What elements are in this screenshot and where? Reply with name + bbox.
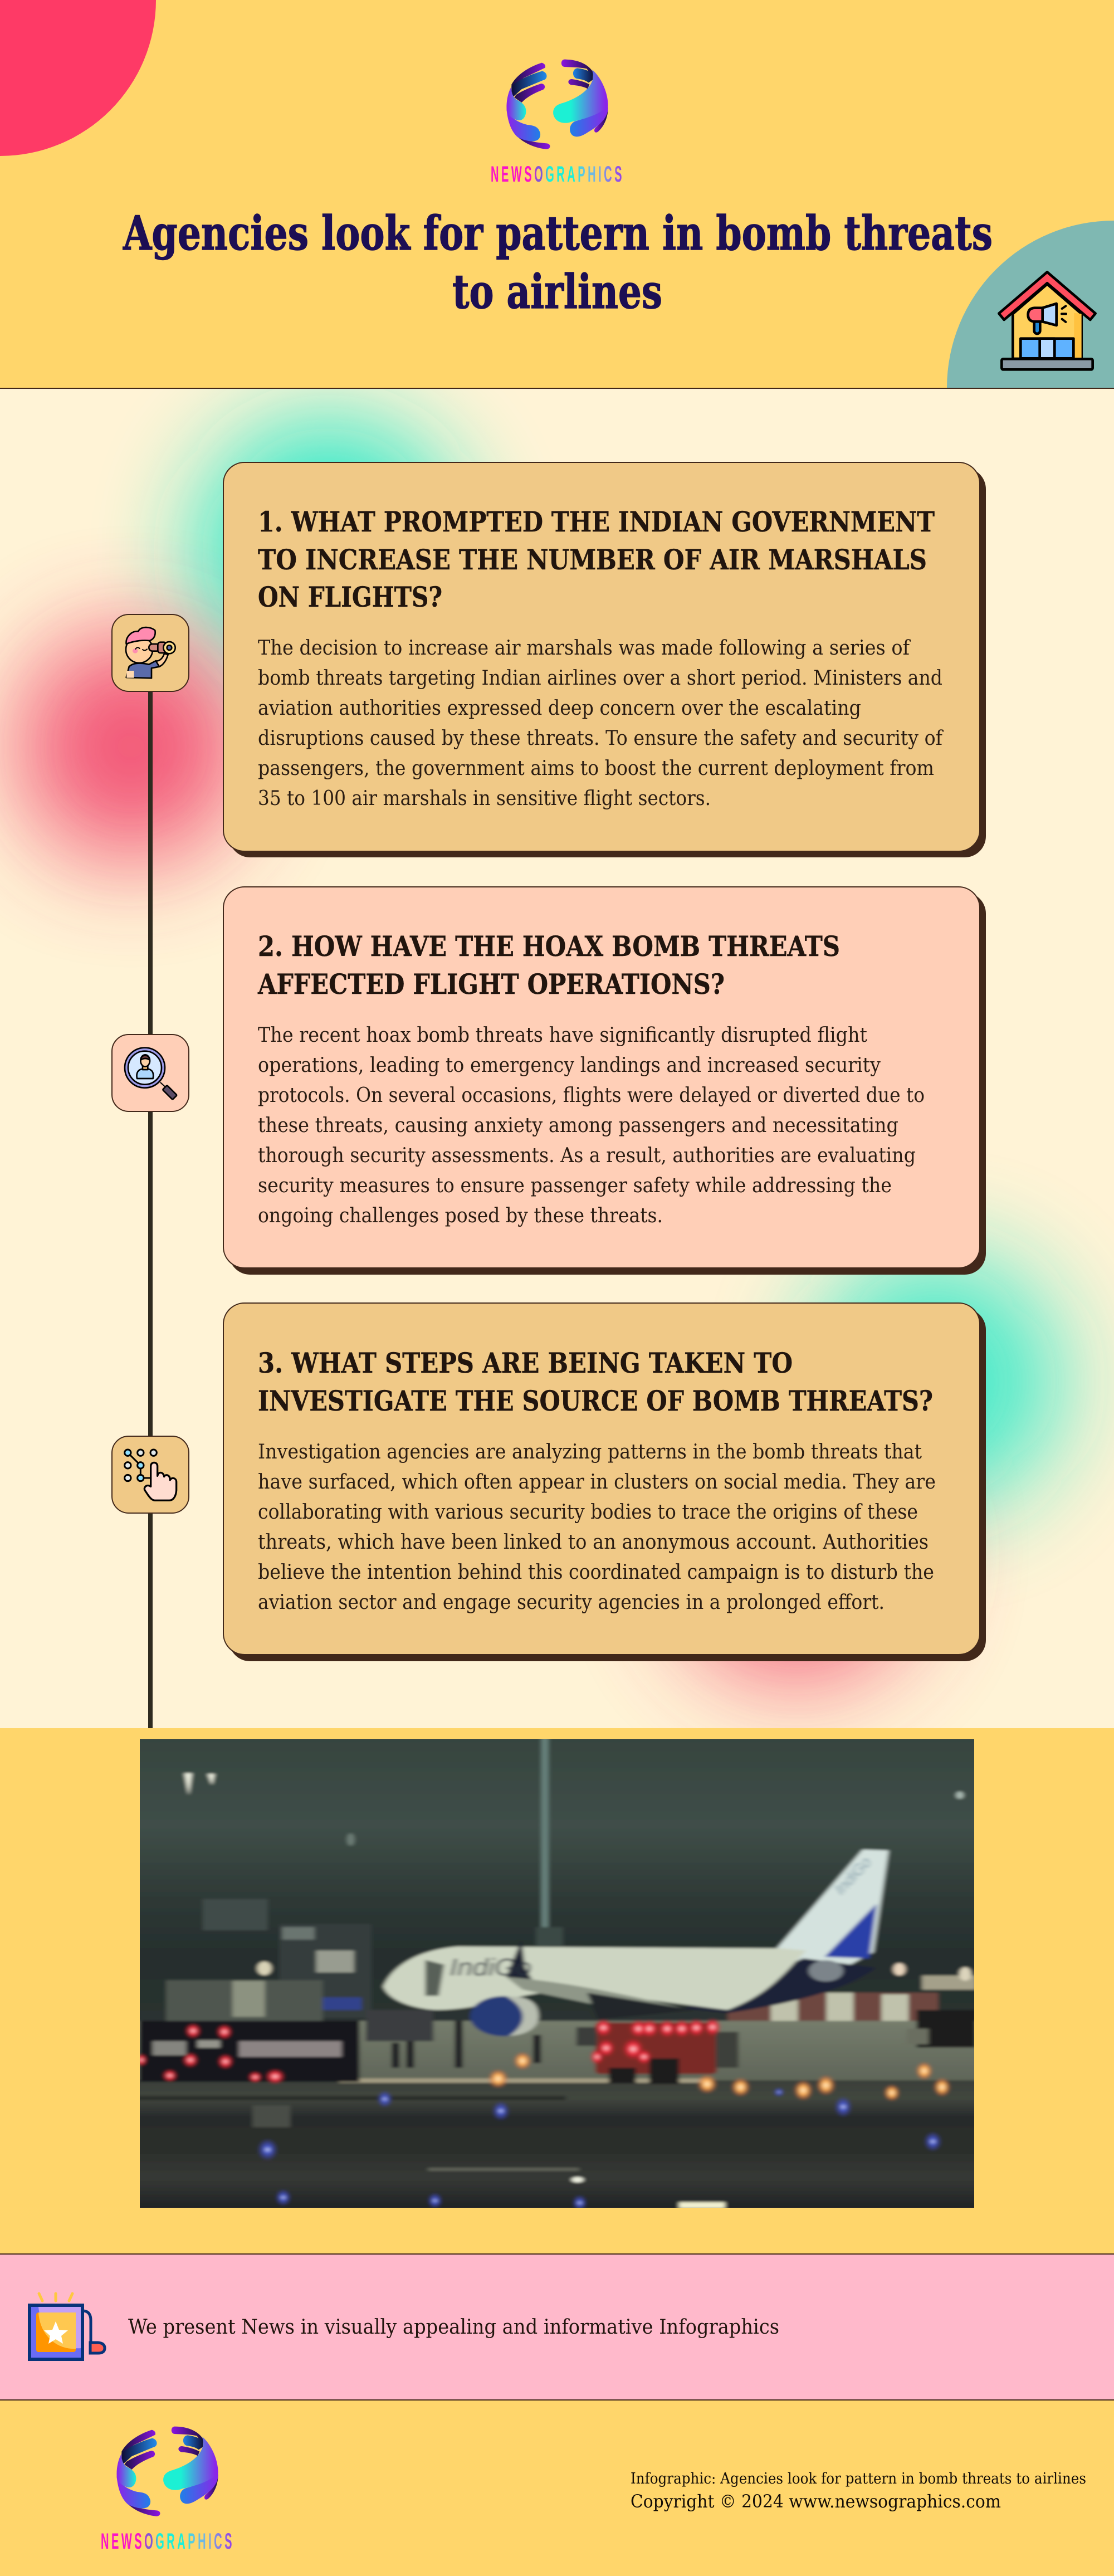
icon tile 2: magnifier with person xyxy=(112,1035,189,1111)
title: to airlines xyxy=(452,264,662,319)
card 1 body text: passengers, the government aims to boost the current deployment from xyxy=(258,757,934,780)
card 1 body text: bomb threats targeting Indian airlines over a short period. Ministers and xyxy=(258,667,942,690)
icon tile 1: person with telescope xyxy=(112,614,189,691)
parked buses xyxy=(139,2021,359,2082)
aircraft xyxy=(366,1850,888,2068)
panel: timeline section background xyxy=(0,389,1114,1728)
card 2 heading: 2. HOW HAVE THE HOAX BOMB THREATS xyxy=(258,930,840,963)
blurred teal glow top xyxy=(198,421,460,682)
teal quarter circle xyxy=(947,221,1114,388)
footer credit text: Copyright © 2024 www.newsographics.com xyxy=(631,2491,1001,2512)
card 1 heading: TO INCREASE THE NUMBER OF AIR MARSHALS xyxy=(258,543,927,576)
card 3 heading: 3. WHAT STEPS ARE BEING TAKEN TO xyxy=(258,1346,793,1379)
card 1 heading: ON FLIGHTS? xyxy=(258,580,442,613)
card 1 body text xyxy=(258,637,944,810)
card 3 shadow xyxy=(229,1309,986,1661)
footer logo wordmark: NEWSOGRAPHICS xyxy=(101,2529,234,2554)
footer logo xyxy=(101,2427,234,2554)
night sky xyxy=(123,1733,992,2027)
blue taxiway lights xyxy=(258,2087,941,2211)
icon: mug with star xyxy=(30,2294,105,2359)
card 2 heading: AFFECTED FLIGHT OPERATIONS? xyxy=(257,968,725,1001)
apron xyxy=(123,2021,992,2082)
card 2 body text: protocols. On several occasions, flights were delayed or diverted due to xyxy=(258,1084,925,1107)
header panel xyxy=(0,0,1114,389)
card 2 heading xyxy=(257,930,840,1001)
footer credit text xyxy=(631,2470,1086,2512)
timeline vertical line xyxy=(148,691,153,1728)
card 1 shadow xyxy=(229,468,986,857)
card 2 body text: The recent hoax bomb threats have significantly disrupted flight xyxy=(258,1024,867,1047)
logo mark xyxy=(506,60,608,149)
card 3 body text: believe the intention behind this coordinated campaign is to disturb the xyxy=(258,1561,934,1584)
card 2 shadow xyxy=(229,892,986,1275)
orange runway lights xyxy=(488,2052,950,2101)
card 2 body text: operations, leading to emergency landings and increased security xyxy=(258,1054,881,1077)
card 3 body text: Investigation agencies are analyzing patterns in the bomb threats that xyxy=(258,1441,922,1463)
strapline text: We present News in visually appealing and informative Infographics xyxy=(128,2316,779,2339)
header divider xyxy=(0,388,1114,389)
card 1 heading: 1. WHAT PROMPTED THE INDIAN GOVERNMENT xyxy=(258,505,935,538)
card 2 body text: these threats, causing anxiety among passengers and necessitating xyxy=(258,1114,898,1137)
runway foreground xyxy=(123,2080,992,2214)
card 1 xyxy=(223,462,986,857)
card 3 panel xyxy=(223,1303,980,1655)
light pole xyxy=(541,1733,548,1946)
card 2 body text: ongoing challenges posed by these threats. xyxy=(258,1204,663,1227)
card 3 heading xyxy=(258,1346,933,1417)
footer logo mark xyxy=(116,2427,218,2516)
card 2 panel xyxy=(223,887,980,1268)
card 2 xyxy=(223,887,986,1275)
card 1 body text: aviation authorities expressed deep concern over the escalating xyxy=(258,697,861,720)
card 1 heading xyxy=(258,505,935,613)
decorative pink quarter circle xyxy=(0,0,156,156)
logo: newsographics xyxy=(491,60,624,187)
card 3 body text xyxy=(258,1441,936,1614)
blurred pink glow left xyxy=(17,632,245,861)
card 3 body text: collaborating with various security bodies to trace the origins of these xyxy=(258,1501,918,1524)
card 1 body text: 35 to 100 air marshals in sensitive flight sectors. xyxy=(258,787,711,810)
logo wordmark: NEWSOGRAPHICS xyxy=(491,162,624,187)
card 3 xyxy=(223,1303,986,1661)
card 3 body text: aviation sector and engage security agencies in a prolonged effort. xyxy=(258,1591,885,1614)
icon: house with megaphone xyxy=(999,272,1096,369)
card 2 body text: security measures to ensure passenger safety while addressing the xyxy=(258,1174,892,1197)
blurred pink glow bottom xyxy=(671,1429,922,1680)
icon tile 3: hand on pattern dots xyxy=(112,1436,189,1513)
distant hangar xyxy=(727,1963,976,2022)
blurred teal glow right xyxy=(810,1256,1061,1507)
card 3 body text: have surfaced, which often appear in clusters on social media. They are xyxy=(258,1471,936,1494)
card 3 heading: INVESTIGATE THE SOURCE OF BOMB THREATS? xyxy=(258,1384,933,1417)
red warning lights xyxy=(136,2018,721,2085)
card 1 panel xyxy=(223,462,980,851)
right-side vehicle xyxy=(907,2010,976,2047)
card 1 body text: The decision to increase air marshals was made following a series of xyxy=(258,637,911,660)
footer xyxy=(101,2427,1086,2554)
tail livery text: IndiGo xyxy=(831,1853,874,1898)
photo: IndiGo aircraft on airport apron at night xyxy=(123,1733,992,2214)
panel: pink strapline band xyxy=(0,2253,1114,2401)
blurred terminal buildings xyxy=(166,1899,372,2021)
card 2 body text xyxy=(258,1024,925,1227)
aircraft livery text: IndiGo xyxy=(449,1954,531,1981)
white highlights xyxy=(184,1773,964,2208)
card 1 body text: disruptions caused by these threats. To ensure the safety and security of xyxy=(258,727,944,750)
card 3 body text: threats, which have been linked to an anonymous account. Authorities xyxy=(258,1531,929,1554)
fire truck xyxy=(576,2022,739,2084)
card 2 body text: thorough security assessments. As a result, authorities are evaluating xyxy=(258,1144,916,1167)
title xyxy=(123,206,993,319)
